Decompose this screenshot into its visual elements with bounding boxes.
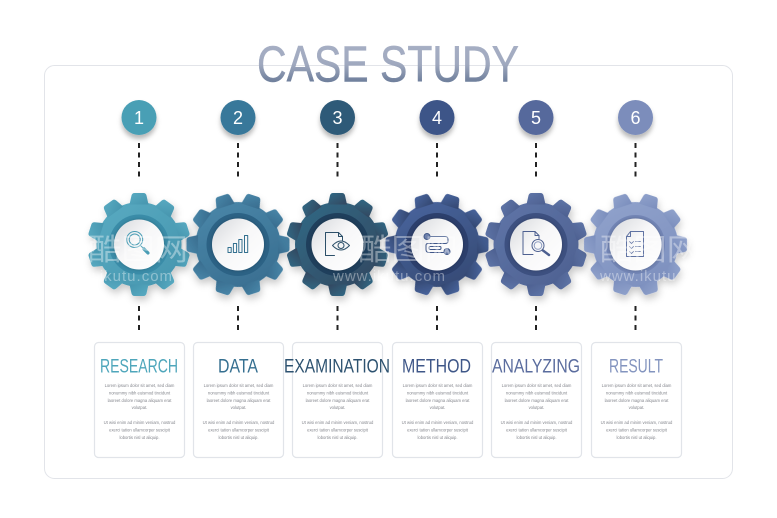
body text: lobortis nisl ut aliquip. [317, 435, 358, 440]
step 4 number badge: 4 [432, 108, 442, 128]
step 1 number badge [122, 100, 156, 135]
card 2: data [194, 342, 284, 458]
heading: data: DATA [218, 356, 258, 378]
body text: Lorem ipsum dolor sit amet, sed diam [105, 383, 175, 388]
icon: flowchart [424, 234, 450, 254]
body text: exerci tation ullamcorper suscipit [506, 428, 568, 432]
body text: volutpat. [330, 405, 345, 410]
icon: magnifier [127, 232, 148, 253]
body text [402, 383, 474, 440]
step 1 number badge: 1 [134, 108, 144, 128]
body text: Ut wisi enim ad minim veniam, nostrud [104, 420, 176, 425]
body text: exerci tation ullamcorper suscipit [307, 428, 369, 432]
step 3 number badge: 3 [332, 108, 343, 128]
body text: Ut wisi enim ad minim veniam, nostrud [501, 420, 573, 425]
step 2 number badge [220, 100, 256, 135]
body text: laoreet dolore magna aliquam erat [406, 398, 470, 403]
watermark text [59, 234, 700, 285]
icon: bars [228, 236, 248, 252]
step 5 number badge: 5 [531, 108, 541, 128]
body text: volutpat. [629, 405, 644, 410]
body text: lobortis nisl ut aliquip. [119, 435, 160, 440]
step 6 number badge: 6 [630, 108, 641, 128]
step 3 number badge [320, 100, 355, 135]
watermark text: 酷图网 [358, 234, 458, 267]
heading: method: METHOD [402, 356, 471, 378]
card 4: method [392, 342, 482, 458]
watermark text: www.ikutu.com [332, 268, 446, 285]
heading: result: RESULT [609, 356, 663, 378]
gear 4 with flowchart icon [372, 179, 502, 310]
gear 5 with document and magnifier icon [484, 193, 588, 296]
icon: document and eye [326, 232, 350, 256]
heading: research: RESEARCH [100, 356, 178, 378]
icon: document and magnifier [523, 232, 549, 255]
body text: laoreet dolore magna aliquam erat [108, 398, 172, 403]
body text: volutpat. [132, 405, 147, 410]
watermark text: www.ikutu.com [59, 268, 173, 285]
body text: nonummy nibh euismod tincidunt [109, 390, 171, 396]
body text [601, 383, 673, 440]
body text [302, 383, 374, 440]
title: CASE STUDY [257, 36, 519, 93]
card 6: result [592, 342, 682, 458]
watermark text: www.ikutu [599, 268, 677, 285]
body text: volutpat. [430, 405, 445, 410]
body text: exerci tation ullamcorper suscipit [606, 428, 668, 432]
body text: nonummy nibh euismod tincidunt [307, 390, 369, 396]
gear 1 with magnifier icon [87, 193, 191, 296]
body text: Lorem ipsum dolor sit amet, sed diam [403, 383, 473, 388]
body text: volutpat. [529, 405, 544, 410]
body text [203, 383, 275, 440]
body text: Ut wisi enim ad minim veniam, nostrud [302, 420, 374, 425]
body text: exerci tation ullamcorper suscipit [407, 428, 469, 432]
body text: nonummy nibh euismod tincidunt [407, 390, 469, 396]
body text: lobortis nisl ut aliquip. [218, 435, 259, 440]
body text: laoreet dolore magna aliquam erat [605, 398, 669, 403]
body text: Lorem ipsum dolor sit amet, sed diam [602, 383, 672, 388]
watermark text: 酷图网 [600, 234, 700, 267]
step 4 number badge [420, 100, 454, 135]
body text [104, 383, 176, 440]
card 5: analyzing [492, 342, 582, 458]
body text [501, 383, 573, 440]
card 3: examination [284, 342, 390, 458]
outer frame panel [44, 66, 732, 478]
card 1: research [94, 342, 184, 458]
icon: checklist document [626, 232, 644, 256]
step 5 number badge [518, 100, 554, 135]
heading: examination: EXAMINATION [284, 356, 390, 378]
body text: nonummy nibh euismod tincidunt [208, 390, 270, 396]
gear 3 with document and eye icon [286, 193, 389, 296]
body text: nonummy nibh euismod tincidunt [606, 390, 668, 396]
body text: lobortis nisl ut aliquip. [417, 435, 458, 440]
watermark text: 酷图网 [88, 234, 188, 267]
body text: nonummy nibh euismod tincidunt [506, 390, 568, 396]
body text: Lorem ipsum dolor sit amet, sed diam [303, 383, 373, 388]
body text: laoreet dolore magna aliquam erat [207, 398, 271, 403]
body text: lobortis nisl ut aliquip. [616, 435, 657, 440]
body text: laoreet dolore magna aliquam erat [505, 398, 569, 403]
body text: lobortis nisl ut aliquip. [516, 435, 557, 440]
body text: Ut wisi enim ad minim veniam, nostrud [402, 420, 474, 425]
body text: exerci tation ullamcorper suscipit [109, 428, 171, 432]
body text: Ut wisi enim ad minim veniam, nostrud [601, 420, 673, 425]
body text: Lorem ipsum dolor sit amet, sed diam [502, 383, 572, 388]
body text: Ut wisi enim ad minim veniam, nostrud [203, 420, 275, 425]
body text: laoreet dolore magna aliquam erat [306, 398, 370, 403]
gear 6 with checklist document icon [570, 179, 701, 310]
body text: volutpat. [231, 405, 246, 410]
body text: exerci tation ullamcorper suscipit [208, 428, 270, 432]
heading: analyzing: ANALYZING [492, 356, 580, 378]
gear 2 with bar chart icon [173, 179, 303, 310]
step 2 number badge: 2 [233, 108, 243, 128]
body text: Lorem ipsum dolor sit amet, sed diam [204, 383, 274, 388]
step 6 number badge [618, 100, 653, 135]
